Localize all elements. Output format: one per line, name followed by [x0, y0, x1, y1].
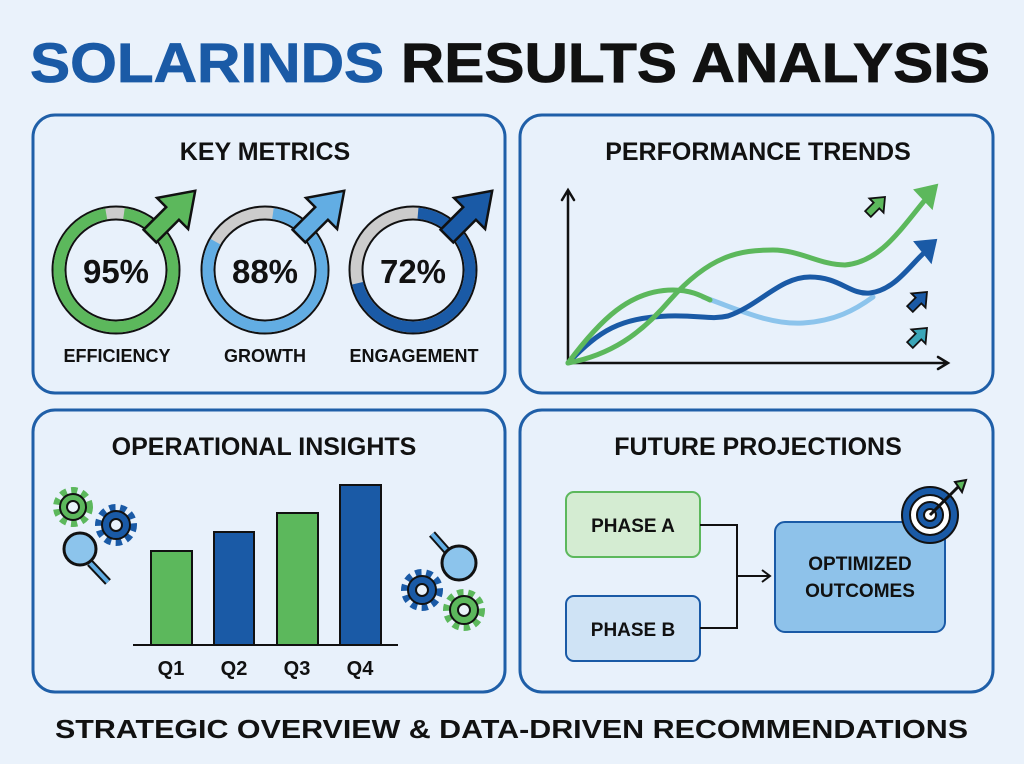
icon: gears and magnifier right: [405, 534, 481, 627]
heading: key metrics: KEY METRICS: [180, 138, 350, 166]
bar labels: Q4: [347, 658, 374, 680]
connector arrow: [700, 525, 770, 628]
gauge: efficiency: EFFICIENCY: [63, 346, 171, 366]
bar labels: Q3: [284, 658, 310, 680]
gauge: engagement: [349, 175, 508, 366]
optimized outcomes box: OUTCOMES: [805, 581, 915, 602]
icon: gears and magnifier left: [57, 491, 133, 582]
panel: key metrics: [33, 115, 508, 393]
bar chart: [133, 485, 398, 645]
phase b box: PHASE B: [591, 620, 675, 641]
bar labels: [158, 658, 374, 680]
heading: performance trends: PERFORMANCE TRENDS: [605, 138, 911, 166]
phase a box: PHASE A: [591, 516, 675, 537]
gauge: growth: 88%: [232, 253, 298, 290]
bar labels: Q2: [221, 658, 247, 680]
heading: future projections: FUTURE PROJECTIONS: [614, 433, 902, 461]
icon: target: [902, 480, 966, 543]
line chart: [562, 185, 948, 369]
panel: performance trends: [520, 115, 993, 393]
title: SOLARINDS RESULTS ANALYSIS: [30, 31, 990, 94]
phase b box: [566, 596, 700, 661]
gauge: engagement: ENGAGEMENT: [349, 346, 479, 366]
gauge: growth: GROWTH: [224, 346, 306, 366]
optimized outcomes box: OPTIMIZED: [808, 554, 912, 575]
phase a box: [566, 492, 700, 557]
gauge: growth: [201, 175, 360, 366]
gauge: efficiency: [52, 175, 211, 366]
small arrows: [861, 190, 934, 352]
panel: operational insights: [33, 410, 505, 692]
bar labels: Q1: [158, 658, 184, 680]
panel: future projections: [520, 410, 993, 692]
gauge: engagement: 72%: [380, 253, 446, 290]
footer: STRATEGIC OVERVIEW & DATA-DRIVEN RECOMMENDATIONS: [55, 714, 968, 744]
optimized outcomes box: [775, 522, 945, 632]
gauge: efficiency: 95%: [83, 253, 149, 290]
heading: operational insights: OPERATIONAL INSIGHTS: [112, 433, 416, 461]
